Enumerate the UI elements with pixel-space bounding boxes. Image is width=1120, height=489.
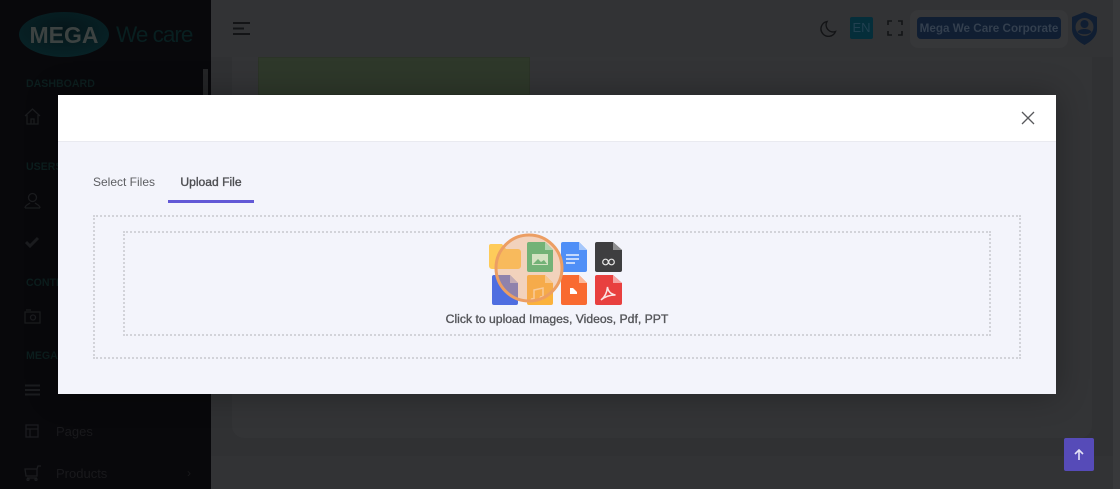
logo: MEGA: [30, 22, 98, 48]
icon: products: [24, 466, 41, 481]
icon: hamburger menu: [233, 22, 250, 35]
logo: We care: [116, 22, 193, 47]
right scrollbar: [1113, 0, 1120, 489]
user name button: [917, 17, 1061, 39]
tab: select files: Select Files: [93, 175, 155, 189]
chevron: ›: [187, 466, 191, 480]
highlight circle: [496, 235, 562, 301]
icon: close: [1022, 112, 1034, 124]
heading: dashboard: DASHBOARD: [26, 78, 95, 90]
icon: menu: [25, 384, 40, 396]
icon: home: [25, 108, 40, 124]
document file: [561, 242, 587, 272]
sidebar: [0, 0, 211, 489]
heading: mega: MEGA: [26, 350, 58, 362]
top navbar: [211, 0, 1120, 57]
inner dropzone: [123, 231, 991, 336]
logo: [19, 12, 193, 57]
slides file: [561, 275, 587, 305]
label: pages: Pages: [56, 424, 93, 439]
image file: [527, 242, 553, 272]
icon: pages: [26, 424, 38, 438]
infinity file: [595, 242, 622, 272]
user name button: Mega We Care Corporate: [920, 22, 1058, 35]
icon: moon: [820, 20, 836, 37]
modal: [58, 95, 1056, 394]
tab: upload file: [168, 174, 254, 203]
folder: [489, 244, 521, 269]
file type icons: [489, 234, 622, 305]
pdf file: [595, 275, 622, 305]
icon: user shield: [1072, 12, 1097, 45]
music file: [527, 275, 553, 305]
upload caption: Click to upload Images, Videos, Pdf, PPT: [446, 312, 668, 326]
outer dropzone: [93, 215, 1021, 359]
bottom strip: [211, 456, 1120, 489]
icon: user: [24, 193, 40, 208]
scroll to top button: [1064, 438, 1094, 471]
heading: users: USERS: [26, 161, 62, 173]
content background panel: [232, 57, 1092, 438]
green banner image: [258, 57, 530, 95]
language button: EN: [852, 20, 871, 35]
icon: fullscreen: [887, 20, 903, 36]
icon: up arrow: [1074, 449, 1084, 460]
language button: [850, 17, 873, 39]
profile pill: [910, 10, 1068, 48]
heading: content: CONTENT: [26, 277, 77, 289]
label: products: Products: [56, 466, 107, 481]
modal header: [58, 95, 1056, 142]
icon: check: [25, 237, 39, 248]
sidebar scrollbar: [203, 69, 208, 99]
blue file: [492, 275, 518, 305]
tab: upload file: Upload File: [180, 175, 242, 189]
icon: media: [24, 310, 40, 324]
